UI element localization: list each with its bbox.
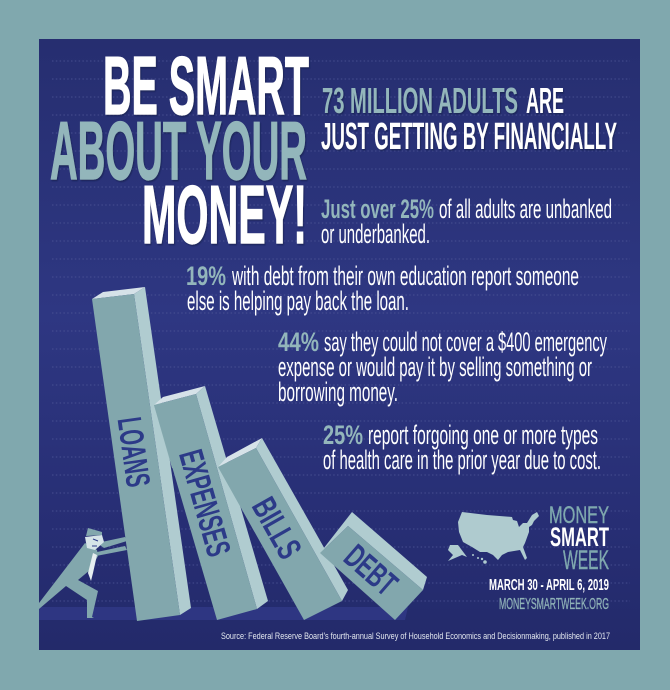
stat: emergency expense <box>278 327 607 407</box>
title <box>50 39 309 261</box>
stat: unbanked: Just over 25% <box>321 194 434 224</box>
text: BE SMART <box>103 39 309 132</box>
logo: Money Smart Week: SMART <box>550 522 609 552</box>
background panel <box>39 39 640 650</box>
logo: Money Smart Week: WEEK <box>563 545 609 575</box>
logo: Money Smart Week: MONEY <box>549 502 609 529</box>
stat: health care: 25% <box>323 420 363 450</box>
icon: US map <box>448 512 539 564</box>
block: debt <box>320 512 427 620</box>
stat: education debt: else is helping pay back the loan. <box>187 286 409 316</box>
icon: man pushing block <box>39 528 127 618</box>
floor band <box>39 607 408 620</box>
block: bills: BILLS <box>244 491 309 566</box>
stat: education debt <box>186 261 579 316</box>
block: bills <box>218 438 348 620</box>
block: debt: DEBT <box>337 537 405 604</box>
block: expenses <box>154 386 268 620</box>
headline: 73 million adults: ARE <box>526 80 564 121</box>
stat: emergency expense: 44% <box>278 327 319 357</box>
stat: health care <box>323 420 601 475</box>
text: ABOUT YOUR <box>50 104 307 197</box>
title: MONEY! <box>142 168 307 261</box>
logo: Money Smart Week <box>549 502 609 575</box>
stat: education debt: 19% <box>186 261 226 291</box>
block: loans: LOANS <box>110 415 157 489</box>
headline: 73 million adults <box>321 80 617 158</box>
block: expenses: EXPENSES <box>171 446 238 561</box>
block: loans <box>92 287 191 621</box>
stat: unbanked <box>321 194 612 249</box>
stat: emergency expense: borrowing money. <box>278 377 398 407</box>
stat: unbanked: or underbanked. <box>321 219 430 249</box>
headline: 73 million adults: 73 MILLION ADULTS <box>322 80 518 121</box>
